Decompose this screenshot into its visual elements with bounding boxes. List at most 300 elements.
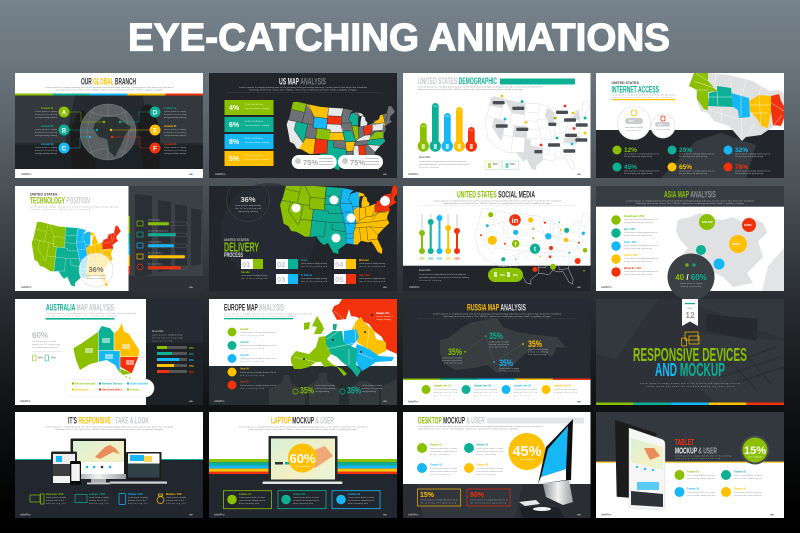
area list: Area 03 (240, 354, 249, 357)
list items: China / 16% (624, 254, 638, 257)
area list: Lorem ipsum is simply dummy text of (240, 357, 276, 360)
dark side bars: 50% (189, 371, 195, 374)
stat boxes: 15% (420, 492, 435, 499)
stat rows: 78% (735, 164, 748, 171)
device stat row: adipiscing elit (46, 502, 66, 505)
color stripe (596, 402, 784, 405)
heading: LAPTOP MOCKUP & USER (271, 416, 334, 426)
sample list: Sample Info 01 (434, 384, 452, 388)
text block: Lorem ipsum is simply dummy text of the printing and (419, 273, 466, 276)
russia stats: Lorem ipsum is simply (528, 349, 548, 351)
list items: the printing and typesetting (624, 234, 652, 237)
panel: technology position: ◂ ▸ (188, 285, 193, 289)
heading: DESKTOP MOCKUP & USER (418, 416, 485, 426)
dashed circle stat: typesetting industry (238, 210, 258, 213)
dark side bars (152, 330, 195, 374)
panel: social media: Lorem ipsum is simply dummy text of the printing and typesetting industry. Lorem ipsum has been the standard (433, 200, 561, 202)
imac (519, 419, 573, 518)
russia stats: dummy text printing (442, 359, 462, 362)
labels: dummy text printing (35, 131, 57, 134)
device stat row: dummy text of the (89, 499, 108, 502)
feature list: Feature 04 (476, 464, 489, 466)
stat rows: 45% (624, 164, 637, 171)
feature boxes: diam nonummy nibh (239, 503, 259, 505)
feature list: Feature 02 (476, 444, 489, 446)
panel: internet access: INTERNET ACCESS (612, 84, 659, 94)
stat text: Lorem ipsum is simply (32, 341, 56, 343)
labels: Content 02 (41, 125, 54, 128)
yellow stat circle (508, 433, 546, 470)
stat callouts: dummy text printing (315, 387, 335, 390)
numbered boxes: text of the printing and (301, 280, 327, 283)
panel: asia map analysis: dummy text ever since the 1500s, when an unknown printer took a galley of type (636, 202, 745, 205)
panel: it's responsive: dummy text ever since the 1500s, when an unknown printer took a galley of type (55, 428, 164, 431)
russia stats: Lorem ipsum is simply (489, 342, 509, 344)
list items: Mongolia / 13% (624, 267, 642, 270)
panel: it's responsive: ◂ ▸ (188, 512, 193, 516)
stat text: 40% (51, 356, 57, 360)
map bubbles: $120M (744, 224, 751, 227)
yellow stat circle (288, 444, 317, 472)
percent circle: dummy text printing (87, 277, 105, 280)
numbered boxes: 01 (242, 260, 250, 269)
stat text: 60% (38, 356, 44, 360)
us map regions (280, 186, 397, 254)
text block (419, 156, 469, 169)
icon: devices (682, 332, 699, 346)
heading: EUROPE MAP ANALYSIS (224, 303, 284, 313)
feature list: Lorem ipsum dolor sit amet (476, 467, 503, 470)
dark side bars: 38% (189, 347, 195, 350)
heading: IT'S RESPONSIVE : TAKE A LOOK (68, 416, 149, 426)
numbered boxes: text of the printing and (301, 265, 327, 268)
panel: europe map analysis: infoPro (214, 399, 225, 403)
panel: our global branch (15, 73, 203, 178)
feature list: Lorem ipsum dolor sit amet (734, 491, 762, 494)
green stat circle (740, 436, 770, 464)
feature boxes: consectetuer adipiscing elit (239, 499, 265, 502)
heading: RUSSIA MAP ANALYSIS (467, 302, 526, 312)
area list: the printing and (240, 387, 264, 390)
heading: MOCKUP & USER (675, 446, 717, 456)
stat rows: the printing and typesetting (624, 155, 652, 158)
green stat circle: User worldwide (748, 456, 763, 458)
dark side bars: Insert Info (152, 330, 164, 333)
thermometer chart: 35% (433, 106, 438, 108)
badges A to F: E (153, 127, 158, 134)
stat rows: Lorem ipsum is simply dummy text of (679, 170, 714, 172)
feature list: Lorem ipsum dolor sit amet (430, 467, 457, 470)
panel: internet access: industry. Lorem ipsum has been the standard (612, 96, 672, 99)
badges A to F: D (153, 109, 158, 116)
stat callouts: 35% (300, 386, 314, 396)
list items: the printing and typesetting (624, 260, 652, 263)
numbered boxes: Lorem ipsum is simply dummy (359, 263, 385, 265)
panel: australia map analysis: ◂ ▸ (188, 399, 193, 403)
sample list: Sample Info 03 (514, 384, 532, 388)
panel: united states demographic: dummy text ever since the 1500s, when an unknown printer took a galley of type (418, 88, 524, 91)
device stat row: dummy text of the (46, 499, 65, 502)
numbered boxes: Nevada (241, 271, 250, 274)
dark side bars: 75% (189, 365, 195, 368)
panel: laptop mockup (209, 412, 397, 518)
panel: asia map analysis: infoPro (601, 285, 612, 289)
asia map (676, 213, 767, 291)
area list: the printing and (240, 360, 264, 363)
panel: us map analysis: infoPro (215, 172, 226, 176)
dark side bars: text of the printing and (152, 336, 182, 340)
device stat row (30, 493, 186, 505)
feature list: diam nonummy (430, 474, 450, 476)
device stat row: adipiscing elit (128, 502, 148, 505)
panel: us map analysis: dummy text ever since the 1500s, when an unknown printer took a galley of type (249, 88, 358, 92)
feature list: Lorem ipsum dolor sit amet (476, 447, 503, 450)
area list (228, 328, 276, 390)
panel: responsive devices section: Lorem ipsum is simply dummy text of the printing and typesetting industry (640, 382, 740, 385)
numbered boxes: Texas (301, 259, 308, 262)
sample list: Lorem ipsum is simply (514, 389, 537, 391)
dark side bars: typesetting (152, 340, 172, 342)
feature list: consectetuer adipiscing elit (687, 494, 715, 497)
stat boxes: the printing and typesetting (420, 502, 456, 504)
device stat row: Lorem ipsum is simply (166, 497, 186, 499)
dashed circle stat: text of the printing and (235, 207, 261, 210)
stat circles: dummy text (627, 129, 641, 132)
device stat row: dummy text of the (166, 499, 185, 502)
panel: technology position: Lorem ipsum has been the standard (30, 208, 90, 211)
stat boxes: Lorem ipsum is simply dummy text of (420, 498, 458, 502)
area list: Lorem ipsum is simply dummy text of (240, 331, 276, 334)
heading: UNITED STATES (612, 81, 639, 85)
dashed circle stat: 36% (240, 195, 256, 204)
stat callouts: and typesetting (315, 390, 329, 393)
labels: Lorem ipsum is simply (164, 147, 186, 149)
region legend pill: Queensland (75, 388, 89, 392)
area list: Area 01 (240, 328, 249, 331)
heading (675, 437, 731, 460)
stat text (32, 331, 62, 361)
device stat row: dummy text of the (128, 499, 147, 502)
feature list: diam nonummy (476, 474, 496, 476)
badges A to F (58, 106, 160, 154)
panel: social media: ◂ ▸ (576, 285, 581, 289)
panel: australia map analysis: Lorem ipsum is simply dummy text of the printing and typesetting industry (46, 312, 136, 315)
sample list: printing (474, 394, 490, 397)
russia stats: 35% (528, 339, 542, 350)
feature list: consectetuer adipiscing elit (476, 470, 503, 473)
numbered boxes: S. Dakota (301, 274, 313, 277)
percentage bars: 6% (229, 122, 240, 129)
dark stat circle: 40 / 60% (675, 273, 707, 282)
panel: united states demographic: infoPro (408, 172, 419, 176)
russia stats (442, 331, 548, 372)
heading: industry and typesetting (675, 457, 720, 460)
labels: dummy text printing (35, 113, 57, 116)
stat circles: Lorem ipsum (656, 129, 670, 131)
labels: and typesetting industry (35, 134, 57, 137)
dark stat circle: Lorem ipsum is simply (680, 283, 702, 285)
feature list (417, 443, 503, 476)
europe map: simply dummy (376, 319, 391, 321)
stat callouts: Lorem ipsum is simply (315, 385, 335, 387)
dark side bars: 60% (189, 353, 195, 356)
list items: Lorem ipsum is simply dummy text of (624, 231, 658, 234)
labels: Content 05 (164, 125, 177, 128)
russia stats: 35% (489, 331, 503, 342)
panel: delivery process (209, 174, 408, 291)
badges A to F: F (153, 145, 157, 152)
russia stats: Lorem ipsum is simply (442, 358, 462, 360)
dark stat circle (668, 254, 714, 300)
panel: europe map analysis: Lorem ipsum has been the standard dummy (224, 315, 294, 318)
list items: the printing and typesetting (624, 221, 652, 224)
demographic map (485, 95, 590, 172)
feature list (674, 470, 762, 497)
section title (633, 344, 747, 380)
feature list: Feature 03 (430, 464, 443, 466)
panel: tablet mockup (596, 412, 784, 518)
heading: UNITED STATES (30, 192, 58, 196)
panel: australia map analysis: infoPro (20, 399, 31, 403)
slider chart (419, 214, 460, 260)
area list: Lorem ipsum is simply dummy text of (240, 344, 276, 347)
panel: responsive devices section: Lorem ipsum has been the standard dummy text ever since (646, 385, 735, 388)
panel: russia map analysis: dummy text ever since the 1500s, when an unknown printer took a galley of type (443, 315, 552, 318)
list items: Lorem ipsum is simply dummy text of (624, 218, 658, 221)
panel: desktop mockup: dummy text ever since the 1500s, when an unknown printer took a galley (418, 428, 518, 430)
panel: laptop mockup: ◂ ▸ (382, 512, 387, 516)
feature boxes: Feature 02 (293, 493, 306, 496)
percent circle: Lorem ipsum is simply (86, 275, 106, 277)
progress bars: Coding Skills (148, 242, 162, 244)
feature boxes (224, 491, 380, 509)
legend boxes (485, 161, 518, 170)
feature boxes: Feature 01 (239, 493, 252, 496)
stat rows (612, 146, 770, 175)
feature list: Feature 03 (687, 488, 700, 490)
percentage bars: 4% (229, 105, 240, 112)
labels: and typesetting industry (35, 116, 57, 119)
list items: Kazakhstan / 25% (624, 215, 645, 218)
panel: tablet mockup: infoPro (601, 512, 612, 516)
panel: asia map analysis: Lorem ipsum is simply dummy text of the printing and typesetting industry. Lorem ipsum has been the standard (626, 200, 754, 202)
panel: our global branch: dummy text ever since the 1500s, when an unknown printer took a galley of type (55, 88, 164, 92)
panel: technology position: infoPro (21, 285, 32, 289)
feature list: Lorem ipsum dolor sit amet (734, 474, 762, 477)
labels: dummy text printing (35, 149, 57, 152)
heading: TABLET (675, 437, 694, 447)
numbered boxes: Lorem ipsum is simply dummy (301, 263, 327, 265)
laptop (262, 436, 342, 484)
panel: technology position (15, 186, 203, 293)
panel: our global branch: infoPro (21, 172, 32, 176)
text block: typesetting industry. Lorem ipsum has been the industry (419, 276, 469, 279)
heading: Lorem ipsum is simply dummy text of the printing (675, 454, 731, 458)
dark side bars: Lorem ipsum is simply dummy (152, 334, 182, 336)
area list: Area 02 (240, 341, 249, 344)
stat boxes (418, 489, 510, 506)
heading: ASIA MAP ANALYSIS (664, 190, 716, 200)
map bubbles: $330M (732, 243, 739, 246)
panel: our global branch: Lorem ipsum is simply dummy text of the printing and typesetting industry. Lorem ipsum has been the standard (45, 86, 173, 89)
color tabs (128, 216, 130, 274)
percentage bars: Lorem ipsum is simply (245, 159, 269, 161)
stat circles (618, 106, 675, 140)
panel: social media: dummy text ever since the 1500s, when an unknown printer took a galley of type (443, 202, 552, 205)
panel: us map analysis (209, 73, 402, 178)
labels: and typesetting industry (35, 152, 57, 155)
thermometer chart: 15% (469, 130, 474, 132)
feature boxes: Lorem ipsum dolor sit amet (239, 496, 265, 499)
yellow stat circle: User worldwide (295, 466, 311, 468)
panel: technology position: TECHNOLOGY POSITION (30, 196, 90, 206)
russia stats: dummy text printing (499, 370, 519, 372)
connectors (64, 112, 104, 122)
stat rows: 65% (679, 164, 692, 171)
russia stats: 35% (448, 347, 462, 358)
russia map (440, 318, 566, 373)
percentage bars (224, 100, 274, 166)
percentage bars: $100.00 Billion (245, 138, 263, 140)
percent circle (79, 253, 113, 287)
list items (611, 215, 658, 277)
percentage bars: Lorem ipsum is simply (245, 125, 269, 127)
dashed circle stat (226, 178, 270, 222)
russia stats: and typesetting (444, 362, 462, 364)
panel: laptop mockup: dummy text ever since the 1500s, when an unknown printer took a galley of type (249, 428, 358, 431)
feature list: Lorem ipsum dolor sit amet (430, 447, 457, 450)
area list: Area 05 (240, 380, 249, 384)
panel: united states demographic: ◂ ▸ (576, 172, 581, 176)
heading (224, 238, 259, 259)
labels: Lorem ipsum is simply (35, 147, 57, 149)
feature list: consectetuer adipiscing elit (687, 477, 715, 480)
area list: Area 04 (240, 368, 249, 370)
area list: the printing and (240, 347, 264, 350)
thermometer chart: 18% (421, 126, 426, 128)
numbered boxes: 05 (335, 275, 343, 284)
region legend pill: New South Wales (102, 388, 123, 392)
sample list: dummy text of the (514, 391, 538, 394)
stat callouts (293, 385, 382, 396)
russia stats: Lorem ipsum is simply (499, 368, 519, 370)
feature list: Lorem ipsum dolor sit amet (687, 491, 715, 494)
numbered boxes: Lorem ipsum is simply dummy (359, 278, 385, 280)
panel: social media: infoPro (409, 285, 420, 289)
labels: and typesetting industry (164, 152, 186, 155)
percentage bars: Lorem ipsum is simply (245, 142, 269, 144)
percent circle: 36% (88, 265, 104, 274)
europe map: Sample Info (376, 312, 390, 315)
device stat row: Mobiles / 13% (166, 493, 183, 496)
numbered boxes: Missouri (359, 259, 369, 262)
green stat circle: 15% (744, 445, 766, 457)
heading: UNITED STATES (224, 238, 249, 242)
feature list: Feature 04 (734, 488, 747, 490)
panel: asia map analysis (596, 186, 784, 300)
stat text: and typesetting industry (32, 346, 58, 349)
legend boxes: 60% (493, 163, 499, 166)
sample list: printing (514, 394, 530, 397)
numbered boxes: text of the printing and (241, 277, 267, 280)
stat rows: Lorem ipsum is simply dummy text of (735, 152, 770, 156)
progress bars (137, 220, 187, 270)
sample list: printing (434, 394, 450, 397)
badges A to F: A (62, 109, 67, 116)
stat boxes: 80% (470, 492, 485, 499)
stat text: dummy text of the printing (32, 343, 60, 346)
stat pills: 75% (350, 158, 365, 167)
feature list: diam nonummy (430, 454, 450, 456)
panel: australia map analysis: Lorem ipsum has been the standard dummy (46, 314, 116, 318)
area list: Lorem ipsum is simply dummy text of (240, 384, 276, 387)
feature list: consectetuer adipiscing elit (430, 470, 457, 473)
region legend pill: Western Australia (75, 382, 96, 386)
thermometer chart: 28% (445, 116, 450, 118)
feature list: consectetuer adipiscing elit (734, 477, 762, 480)
panel: desktop mockup: Lorem ipsum is simply dummy text of the printing and typesetting industry. Lorem ipsum has been (418, 425, 543, 428)
map bubbles: $231.00M (702, 221, 713, 224)
icon: globe (80, 104, 136, 160)
labels: and typesetting industry (164, 134, 186, 137)
device stat row: Tablets / 42% (128, 493, 144, 496)
panel: laptop mockup: infoPro (214, 512, 225, 516)
green stat pill: 20% (513, 274, 519, 277)
device stat row: Desktops / 35% (46, 493, 64, 496)
feature list: Feature 01 (687, 470, 700, 474)
panel: it's responsive (15, 412, 203, 518)
map with social nodes (475, 208, 590, 284)
text block: standard dummy (419, 166, 439, 169)
sample list (422, 384, 578, 397)
thermometer chart (418, 103, 477, 152)
panel: social media (403, 186, 590, 291)
stat text: 60% (32, 331, 48, 340)
panel: it's responsive: infoPro (20, 512, 31, 516)
russia stats: and typesetting (528, 353, 546, 356)
device stat row: Lorem ipsum is simply (46, 497, 66, 499)
list items: Lorem ipsum is simply dummy text of (624, 257, 658, 260)
text block: Lorem ipsum is simply dummy text of the printing and (419, 160, 466, 163)
people silhouettes (269, 373, 397, 405)
stat callouts: and typesetting (362, 390, 376, 393)
green stat pill: 80% (500, 274, 506, 277)
silhouettes (70, 104, 160, 169)
sample list: dummy text of the (554, 391, 578, 394)
panel: russia map analysis: infoPro (408, 400, 419, 404)
feature boxes: diam nonummy nibh (348, 503, 368, 505)
numbered boxes: text of the printing and (359, 280, 385, 283)
labels (35, 107, 186, 155)
device stat row: adipiscing elit (166, 502, 186, 505)
labels: Content 06 (164, 143, 177, 146)
stat callouts: 35% (347, 386, 361, 396)
labels: and typesetting industry (164, 116, 186, 119)
labels: Lorem ipsum is simply (35, 129, 57, 131)
russia stats: and typesetting (489, 346, 507, 348)
sample list: Sample Info 04 (554, 384, 572, 388)
dark side bars: 80% (189, 359, 195, 362)
russia stats: dummy text printing (528, 350, 548, 354)
panel: united states demographic: Lorem ipsum is simply dummy text of the printing and typesetting industry. Lorem ipsum has been (418, 86, 543, 88)
sample list: Lorem ipsum is simply (434, 389, 457, 391)
numbered boxes: 04 (335, 260, 344, 269)
device stat row: Lorem ipsum is simply (128, 497, 148, 499)
bookmark (682, 299, 698, 326)
labels: Content 01 (41, 107, 54, 110)
panel: responsive devices section (596, 299, 784, 405)
feature boxes: diam nonummy nibh (293, 503, 313, 505)
